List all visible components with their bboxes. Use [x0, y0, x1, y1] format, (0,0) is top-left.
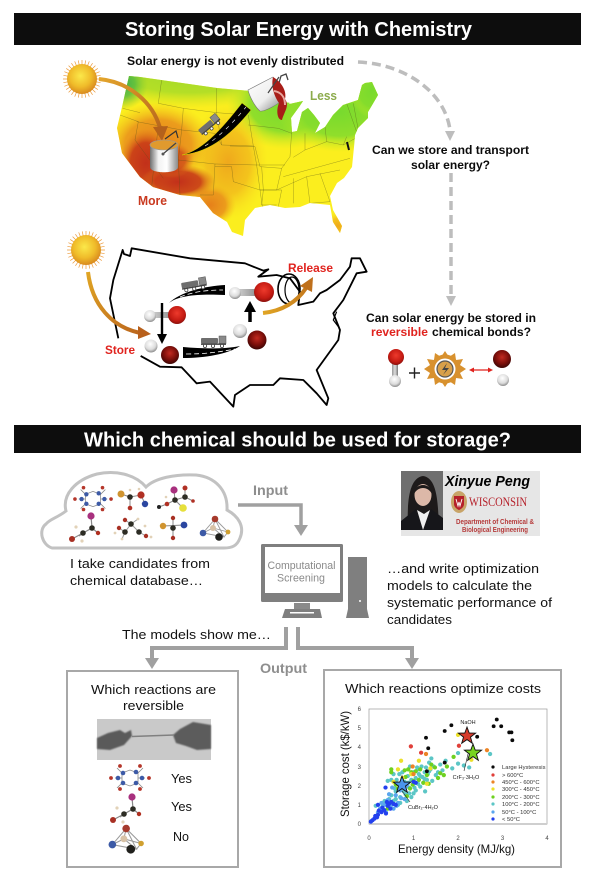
text: …and write optimization models: candidates	[387, 612, 453, 627]
star: CuBr2·4H2O: CuBr₂·4H₂O	[408, 805, 439, 811]
reaction: water-like molecule plus energy gives separated atoms	[388, 349, 511, 387]
label: Less: Less	[310, 89, 337, 103]
y axis ticks: 5	[358, 726, 362, 732]
icon: sun over map	[63, 60, 101, 98]
molecule: cross shaped	[160, 516, 187, 540]
road: lower transport route	[183, 346, 240, 358]
icon: truck on lower route	[201, 336, 226, 348]
text: The models show me…: The models show me…	[122, 627, 271, 642]
x axis ticks: 2	[456, 836, 460, 842]
arrow: sunlight into bucket	[99, 79, 168, 141]
portrait photo	[401, 471, 443, 530]
y axis ticks	[358, 707, 362, 828]
icon: full bucket in the southwest	[150, 131, 178, 172]
cloud outline	[42, 473, 242, 548]
data points	[371, 720, 512, 822]
y axis title: Storage cost (k$/kW)	[338, 711, 352, 817]
leader lines	[402, 727, 468, 802]
text: …and write optimization models: systematic performance of	[387, 595, 552, 610]
atoms: atoms before release	[233, 324, 266, 350]
molecule row: purple chain, Yes	[110, 793, 192, 824]
y axis ticks: 6	[358, 707, 362, 713]
x axis ticks	[367, 836, 549, 842]
icon: truck on upper route	[181, 277, 207, 292]
y axis ticks: 2	[358, 784, 362, 790]
text: …and write optimization models: …and write optimization	[387, 561, 539, 576]
question: Can solar energy be stored in reversible chemical bonds?: chemical bonds?	[432, 327, 531, 339]
arrow: sunlight to storage	[88, 272, 151, 339]
crest	[451, 491, 467, 513]
question: Can we store and transport solar energy?: Can we store and transport	[372, 145, 529, 157]
molecule: branched orange and blue	[118, 488, 148, 510]
label: Release: Release	[288, 263, 333, 275]
molecule: charged molecule before storing	[144, 306, 186, 324]
screen text: Screening	[277, 572, 325, 584]
text: I take candidates from chemical database…	[70, 556, 210, 588]
arrow: atoms recombine	[244, 301, 256, 322]
panel heading	[91, 682, 216, 713]
atoms: separated storage atoms	[144, 340, 179, 364]
legend: > 600°C	[502, 773, 523, 779]
department: Biological Engineering	[462, 527, 528, 534]
icon: sun over outline map	[67, 231, 105, 269]
label: Store: Store	[105, 345, 135, 357]
arrow: output to reversibility panel	[145, 627, 286, 669]
legend: < 50°C	[502, 817, 520, 823]
star: CuBr2·4H2O	[393, 776, 439, 811]
road: upper transport route	[169, 285, 225, 303]
dashed arrow: to reversible bonds question	[446, 173, 456, 306]
molecule row: hexagonal ring, Yes: Yes	[171, 771, 192, 786]
molecule row: purple chain, Yes: Yes	[171, 799, 192, 814]
legend: 300°C - 450°C	[502, 787, 540, 793]
screen text: Computational	[268, 560, 336, 572]
molecule: recombined molecule at release	[229, 282, 274, 302]
text: I take candidates from chemical database…: chemical database…	[70, 573, 203, 588]
tower	[346, 557, 369, 618]
panel heading: Which reactions optimize costs	[345, 681, 542, 696]
question: Can we store and transport solar energy?	[372, 145, 529, 172]
molecule row: tetrahedral cage, No: No	[173, 829, 189, 844]
question: Can solar energy be stored in reversible chemical bonds?: Can solar energy be stored in	[366, 313, 536, 325]
section bar: Which chemical should be used for storage?	[14, 425, 581, 453]
arrow: energy released	[263, 277, 313, 313]
panel: which reactions optimize costs	[324, 670, 561, 867]
molecule: tetrahedral cage	[200, 516, 230, 541]
section bar: Which chemical should be used for storage?: Which chemical should be used for storage?	[84, 430, 511, 452]
title bar: Storing Solar Energy with Chemistry	[14, 13, 581, 45]
screen text	[268, 560, 336, 584]
x axis ticks: 3	[501, 836, 505, 842]
star: CrF3·3H2O: CrF₃·3H₂O	[453, 775, 480, 781]
label: Output: Output	[260, 661, 308, 676]
star: NaOH: NaOH	[460, 720, 476, 726]
label: More: More	[138, 194, 167, 208]
title bar: Storing Solar Energy with Chemistry: Storing Solar Energy with Chemistry	[125, 19, 473, 41]
molecule: hexagonal ring	[73, 486, 113, 511]
cloud of candidate molecules	[42, 473, 242, 548]
x axis ticks: 1	[412, 836, 416, 842]
university name: WISCONSIN	[469, 495, 527, 509]
legend: 200°C - 300°C	[502, 795, 540, 801]
monitor stand	[282, 603, 322, 618]
arrow: bond splits during storage	[157, 303, 167, 344]
label: Input: Input	[253, 483, 289, 498]
star: NaOH	[458, 720, 476, 743]
legend	[491, 765, 546, 823]
text: …and write optimization models	[387, 561, 552, 627]
molecule: purple and yellow	[157, 486, 195, 512]
y axis ticks: 1	[358, 803, 362, 809]
legend: 450°C - 600°C	[502, 780, 540, 786]
icon: tipping bucket pouring red paint	[248, 74, 288, 120]
molecule row: tetrahedral cage, No	[109, 825, 189, 854]
department	[456, 519, 534, 534]
outline map of the United States	[110, 248, 367, 407]
x axis title: Energy density (MJ/kg)	[398, 842, 515, 856]
text: I take candidates from chemical database…: I take candidates from	[70, 556, 210, 571]
arrow: output to cost panel	[298, 627, 419, 669]
solar resource map of the United States	[117, 76, 378, 236]
question: Can solar energy be stored in reversible chemical bonds?: reversible	[371, 327, 428, 339]
panel heading: Which reactions are	[91, 682, 216, 697]
arrow: input into computer	[238, 505, 308, 536]
x axis ticks: 0	[367, 836, 371, 842]
text: …and write optimization models: models to calculate the	[387, 578, 532, 593]
monitor	[261, 544, 343, 602]
molecule: carbon chain with hydroxyls	[114, 518, 152, 540]
computer: Computational Screening	[261, 544, 369, 618]
icon: truck on the road	[197, 113, 222, 137]
legend: 100°C - 200°C	[502, 802, 540, 808]
y axis ticks: 4	[358, 745, 362, 751]
x axis ticks: 4	[545, 836, 549, 842]
question: Can solar energy be stored in reversible chemical bonds?	[366, 313, 536, 339]
name: Xinyue Peng	[444, 473, 530, 490]
researcher card: Xinyue Peng	[401, 471, 540, 536]
legend: Large Hysteresis	[502, 765, 546, 771]
heading: Solar energy is not evenly distributed: Solar energy is not evenly distributed	[127, 56, 344, 68]
molecule: purple chain	[69, 512, 100, 543]
road: transporting energy across the map	[182, 103, 251, 155]
question: Can we store and transport solar energy?: solar energy?	[411, 160, 490, 172]
legend: 50°C - 100°C	[502, 810, 536, 816]
scatter chart: storage cost vs energy density	[338, 707, 549, 856]
photo: hands stretching a rubber band	[97, 719, 211, 760]
molecule row: hexagonal ring, Yes	[109, 764, 192, 791]
department: Department of Chemical &	[456, 519, 534, 526]
y axis ticks: 0	[358, 822, 362, 828]
dashed arrow: to storage question	[358, 62, 455, 141]
y axis ticks: 3	[358, 765, 362, 771]
panel: which reactions are reversible	[67, 671, 238, 867]
star: CrF3·3H2O	[453, 744, 482, 781]
panel heading: reversible	[123, 698, 184, 713]
